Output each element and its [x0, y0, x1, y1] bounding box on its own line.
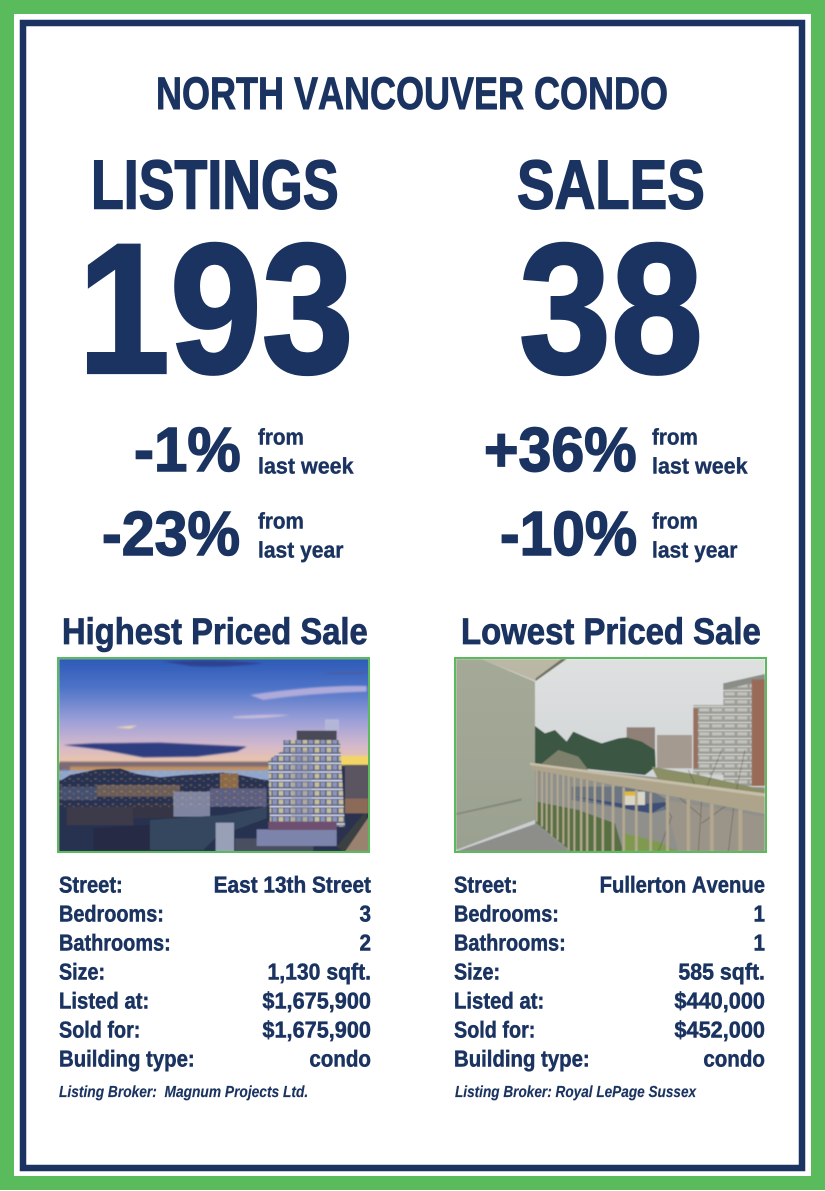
property details: 1 [753, 900, 765, 926]
yearly change: -23%: -23% [102, 499, 240, 569]
big number: 193 listings: 193 [78, 206, 354, 412]
property details [59, 872, 371, 1072]
weekly change: -1% [134, 415, 354, 485]
photo border [58, 658, 369, 852]
property details: 3 [359, 900, 371, 926]
property details: condo [309, 1046, 371, 1072]
photo: balcony view [456, 659, 765, 852]
yearly change: -23% [102, 499, 344, 569]
weekly change: +36%: from [652, 424, 698, 450]
weekly change: +36%: last week [652, 454, 748, 478]
listing broker: Listing Broker: Royal LePage Sussex [455, 1084, 697, 1101]
property details: Size: [59, 958, 105, 984]
panel: listings stats [78, 146, 354, 569]
property details: Sold for: [59, 1016, 140, 1042]
yearly change: -23%: last year [258, 538, 344, 562]
yearly change: -10% [500, 499, 738, 569]
title: NORTH VANCOUVER CONDO [156, 68, 668, 119]
property details: Bedrooms: [59, 900, 164, 926]
heading: listings: LISTINGS [91, 146, 339, 224]
property details: Bathrooms: [454, 930, 566, 956]
heading: highest priced sale: Highest Priced Sale [62, 611, 368, 652]
property details: Street: [454, 872, 518, 898]
property details: Fullerton Avenue [600, 872, 765, 898]
yearly change: -10%: -10% [500, 499, 637, 569]
panel: highest priced sale [58, 611, 371, 1101]
property details: Building type: [454, 1046, 590, 1072]
yearly change: -23%: from [258, 508, 304, 534]
property details: Size: [454, 958, 500, 984]
weekly change: -1%: last week [258, 454, 354, 478]
property details: 2 [359, 930, 371, 956]
property details: $1,675,900 [262, 988, 371, 1014]
property details: Bathrooms: [59, 930, 171, 956]
listing broker: Listing Broker: Magnum Projects Ltd. [59, 1084, 308, 1101]
property details: East 13th Street [214, 872, 371, 898]
property details: 1,130 sqft. [267, 958, 371, 984]
weekly change: +36%: +36% [484, 415, 637, 485]
property details: $1,675,900 [262, 1016, 371, 1042]
big number: 38 sales: 38 [519, 206, 703, 412]
photo border [455, 658, 766, 852]
photo: dusk city tower [59, 659, 370, 852]
heading: lowest priced sale: Lowest Priced Sale [461, 611, 761, 652]
panel: sales stats [484, 146, 748, 569]
property details: $452,000 [674, 1016, 765, 1042]
weekly change: -1%: -1% [134, 415, 241, 485]
weekly change: +36% [484, 415, 748, 485]
weekly change: -1%: from [258, 424, 304, 450]
property details: Listed at: [454, 988, 544, 1014]
property details: Street: [59, 872, 123, 898]
panel: lowest priced sale [454, 611, 766, 1101]
property details: Building type: [59, 1046, 195, 1072]
property details: Sold for: [454, 1016, 535, 1042]
property details: 585 sqft. [678, 958, 765, 984]
property details: $440,000 [674, 988, 765, 1014]
property details: condo [703, 1046, 765, 1072]
property details [454, 872, 765, 1072]
yearly change: -10%: from [652, 508, 698, 534]
property details: 1 [753, 930, 765, 956]
yearly change: -10%: last year [652, 538, 738, 562]
property details: Bedrooms: [454, 900, 559, 926]
heading: sales: SALES [517, 146, 705, 224]
property details: Listed at: [59, 988, 149, 1014]
